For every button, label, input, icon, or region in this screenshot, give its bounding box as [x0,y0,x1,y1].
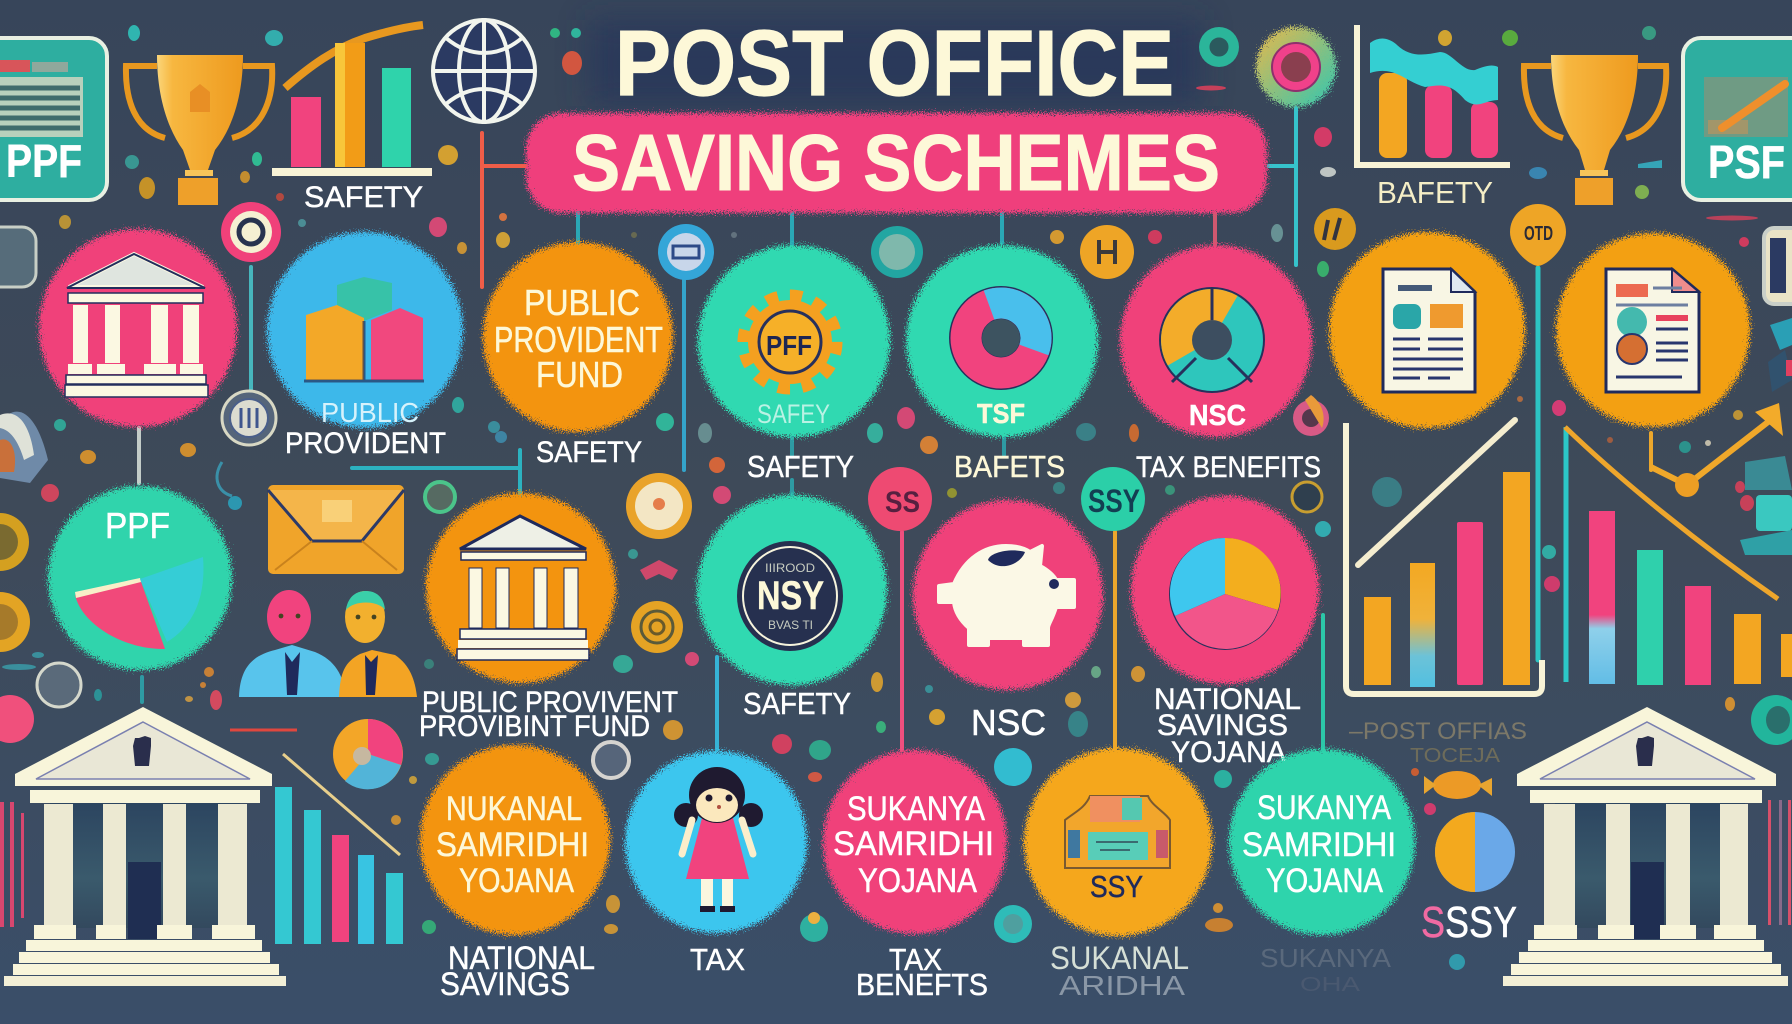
chart: falling bars [1565,427,1792,685]
label: public provident fund: PROVIBINT FUND [419,710,650,743]
label: national savings lower [440,940,595,1002]
circle: donut on teal: TSF [977,398,1025,429]
label: sukanal aridha [1050,940,1189,1001]
chart: falling bars left [230,730,403,944]
circle: sukanya samridhi yojana teal [1229,749,1415,935]
circle: sukanya samridhi yojana teal: SAMRIDHI [1242,826,1396,864]
label: SSSY: SSSY [1421,898,1517,947]
badge: gold [1080,225,1134,279]
badge: SS: SS [885,486,920,519]
circle: public provident fund [483,242,673,432]
badge: top teal [1199,27,1239,67]
circle: sukanya samridhi yojana teal: YOJANA [1266,862,1383,900]
label: national savings yojana: SAVINGS [1157,709,1288,742]
label: national savings lower: SAVINGS [440,966,570,1002]
label: national savings yojana [1154,683,1301,769]
circle: donut on pink [1120,245,1312,437]
connector lines [139,108,1651,750]
circle: piggy bank on pink [913,500,1103,690]
circle: blocks on blue: PUBLIC [321,397,419,428]
label: faded sukanya [1260,943,1392,996]
label: safety: SAFETY [536,436,642,469]
edge icons left [0,227,455,743]
badge: SS [868,467,932,531]
icon: globe [433,18,535,124]
label: faded post office: –POST OFFIAS [1349,718,1527,745]
icon: two people [239,590,417,697]
circle: PPF pie on teal: PPF [105,505,170,546]
card: PSF [1683,38,1792,200]
arrow: rising orange [1651,403,1783,497]
circle: NSY on teal: BVAS TI [768,618,813,632]
circle: NSY on teal: NSY [757,574,824,618]
bar chart: top left [272,25,432,176]
badge: SSY: SSY [1088,483,1140,519]
circle: girl on blue [625,751,807,933]
circle: SSY scheme on orange [1024,748,1212,936]
badge: ring [222,391,276,445]
icon: radial target [1256,27,1336,107]
label: safety lower: SAFETY [743,686,851,721]
circle: sukanya samridhi yojana pink [823,750,1007,934]
circle: public provident fund: PROVIDENT [494,319,663,360]
circle: blocks on blue [267,232,463,428]
label: tax: TAX [690,942,745,977]
icon: trophy right [1524,55,1666,205]
label: sukanal aridha: ARIDHA [1059,970,1185,1001]
circle: gear on teal: PFF [766,330,812,361]
title halo [590,20,1200,106]
badge: gold coin [631,601,683,653]
badge: gold pin: OTD [1524,223,1553,245]
area chart: top right [1357,25,1510,165]
circle: gear on teal [698,245,890,437]
label: faded post office: TOCEJA [1410,745,1501,767]
circle: donut on pink: NSC [1189,400,1246,432]
label: bafety: BAFETY [1377,175,1493,210]
circle: sukanya samridhi yojana teal: SUKANYA [1257,789,1391,827]
lines: right edge [1768,800,1791,925]
circle: bank on orange [426,493,616,683]
circle: donut on teal [906,245,1098,437]
label: national savings yojana: YOJANA [1171,736,1286,769]
label: tax benefits: TAX BENEFITS [1136,451,1321,484]
circle: nukanal samridhi yojana [420,745,610,935]
label: faded post office [1349,718,1527,767]
edge icons right [1740,228,1792,745]
circle: sukanya samridhi yojana pink: SAMRIDHI [833,825,994,863]
label: tax benefits lower: BENEFTS [856,967,988,1002]
icon: trophy left [126,55,272,205]
banner: saving schemes: SAVING SCHEMES [572,118,1220,207]
label: NSC: NSC [971,702,1046,743]
circle: sukanya samridhi yojana pink: SUKANYA [847,790,985,828]
circle: NSY on teal: IIIROOD [765,561,815,575]
badge: pink top [221,202,281,262]
chart: rising bars [1346,420,1542,694]
label: safety top: SAFETY [304,181,423,214]
lines: left edge [0,802,24,927]
label: faded sukanya: OHA [1300,974,1361,996]
label: safety middle: SAFETY [747,449,854,484]
label: public provident fund [419,686,678,743]
big bank right [1503,707,1788,986]
badge: gold pin [1510,204,1566,266]
icon: envelope [268,485,404,574]
label: national savings lower: NATIONAL [448,940,595,976]
chart: half ball [1435,812,1515,892]
icon: fish [1424,771,1492,799]
small badges [593,395,1402,943]
badge: SSY [1081,467,1145,531]
label: faded sukanya: SUKANYA [1260,943,1392,973]
circle: sukanya samridhi yojana pink: YOJANA [858,862,977,900]
badge: gold ring top [626,473,692,539]
card: PPF: PPF [6,135,82,187]
label: tax benefits lower: TAX [889,942,942,977]
circle: pie on pink [1131,496,1319,684]
badge: gold small [1314,208,1356,250]
circle: NSY on teal [697,495,887,685]
big bank left [4,707,286,986]
circle: document one [1329,232,1525,428]
circle: SSY scheme on orange: SSY [1090,869,1143,904]
title: POST OFFICE [615,11,1174,115]
circle: gear on teal: SAFEY [757,399,830,429]
badge: blue [658,224,714,280]
circle: nukanal samridhi yojana: NUKANAL [446,790,582,828]
label: public provident fund: PUBLIC PROVIVENT [422,686,678,719]
chart: pie multicolor [333,719,403,789]
badge: teal tax [871,226,923,278]
circle: public provident fund: PUBLIC [524,282,640,323]
circle: bank on pink [39,229,237,427]
label: sukanal aridha: SUKANAL [1050,940,1189,976]
label: national savings yojana: NATIONAL [1154,683,1301,716]
circle: document two [1556,233,1750,427]
circle: PPF pie on teal [48,486,232,670]
circle: public provident fund: FUND [536,354,623,395]
circle: nukanal samridhi yojana: YOJANA [459,862,574,900]
label: bafets: BAFETS [954,449,1065,484]
card: PPF [0,38,107,200]
label: provident: PROVIDENT [285,427,446,460]
circle: nukanal samridhi yojana: SAMRIDHI [436,826,589,864]
label: tax benefits lower [856,942,988,1002]
